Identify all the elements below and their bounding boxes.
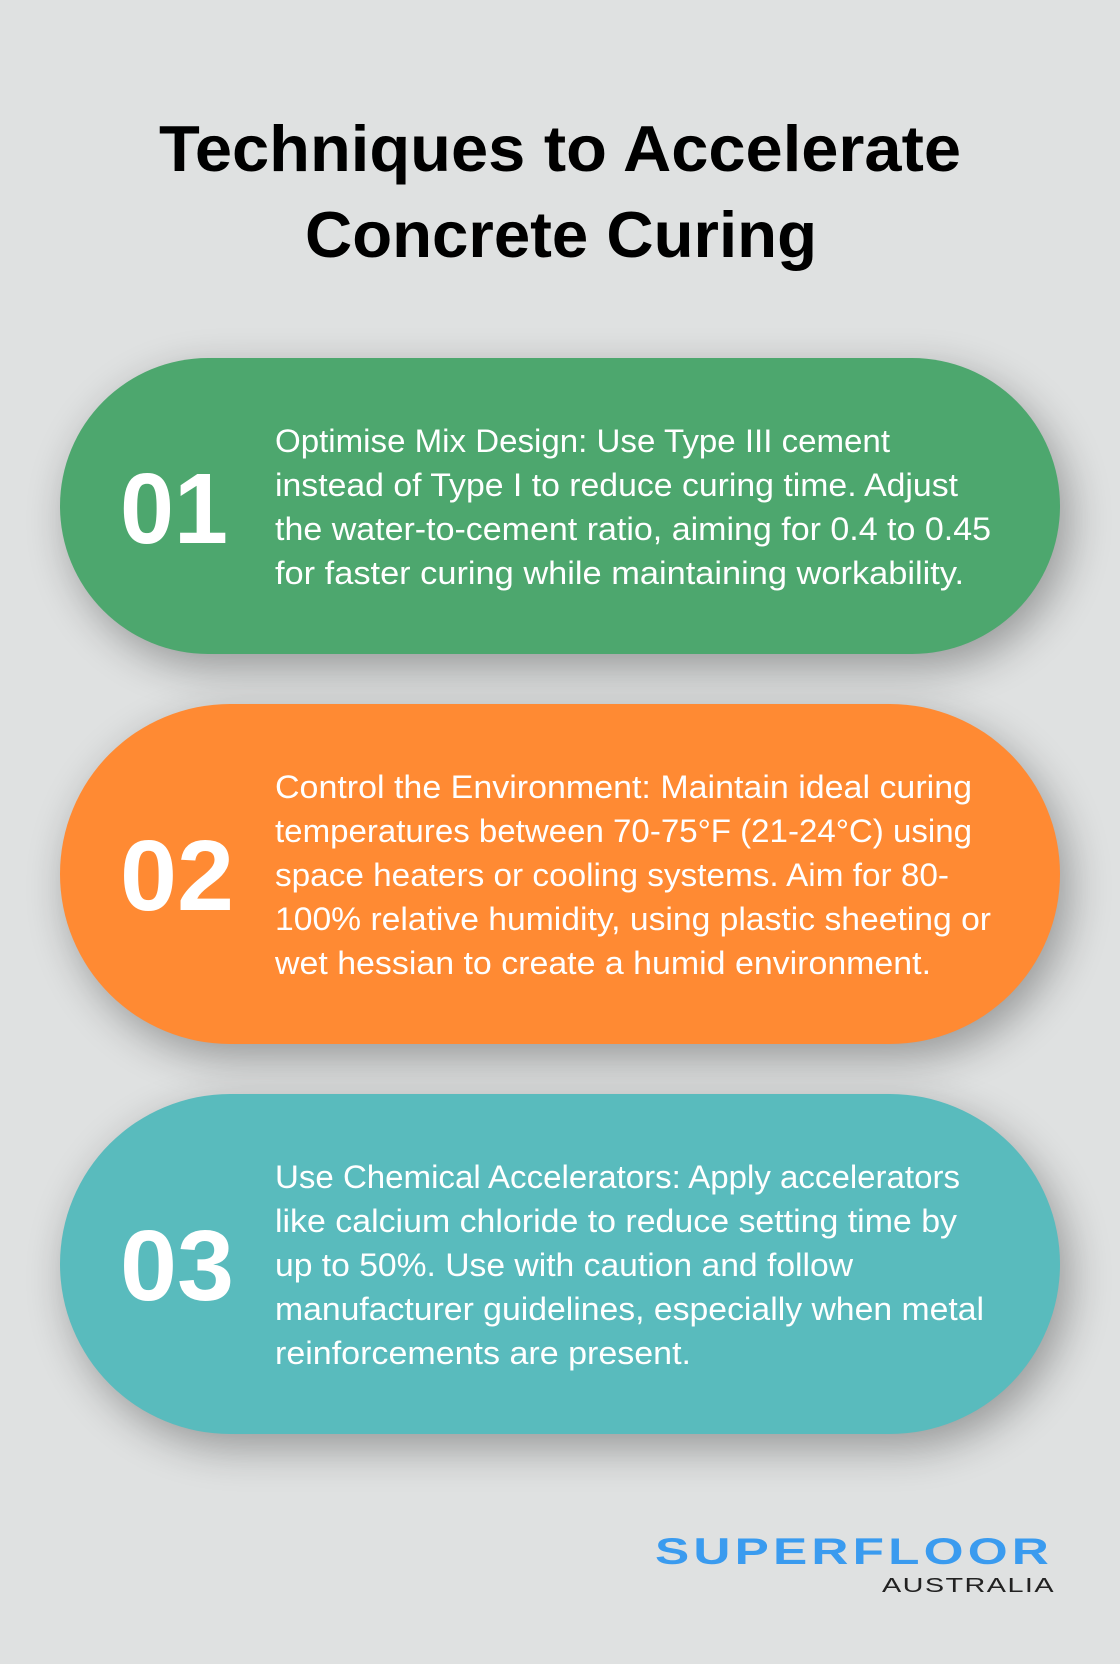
number 03: 03 (120, 1210, 234, 1322)
title (159, 112, 961, 271)
text block: step 2 description: Control the Environment: Maintain ideal curing (275, 769, 972, 805)
text block: step 3 description: up to 50%. Use with caution and follow (275, 1247, 854, 1283)
text block: step 3 description (275, 1159, 984, 1371)
panel: step 3 teal pill (60, 1094, 1060, 1434)
text block: step 3 description: Use Chemical Accelerators: Apply accelerators (275, 1159, 960, 1195)
panel: step 2 orange pill (60, 704, 1060, 1044)
text block: step 3 description: manufacturer guidelines, especially when metal (275, 1291, 984, 1327)
text block: step 2 description (274, 769, 991, 981)
text block: step 3 description: like calcium chloride to reduce setting time by (275, 1203, 957, 1239)
text block: step 1 description: Optimise Mix Design: Use Type III cement (275, 423, 890, 459)
logo: Superfloor Australia (655, 1531, 1055, 1597)
text block: step 1 description: instead of Type I to reduce curing time. Adjust (275, 467, 958, 503)
text block: step 2 description: wet hessian to create a humid environment. (274, 945, 931, 981)
number 01: 01 (120, 453, 228, 565)
logo: Superfloor Australia: AUSTRALIA (882, 1575, 1055, 1597)
text block: step 1 description (275, 423, 991, 591)
text block: step 1 description: the water-to-cement ratio, aiming for 0.4 to 0.45 (275, 511, 991, 547)
text block: step 1 description: for faster curing while maintaining workability. (275, 555, 964, 591)
panel: step 1 green pill (60, 358, 1060, 654)
text block: step 2 description: 100% relative humidity, using plastic sheeting or (275, 901, 991, 937)
logo: Superfloor Australia: SUPERFLOOR (655, 1531, 1053, 1572)
title: Techniques to Accelerate (159, 112, 961, 185)
text block: step 2 description: space heaters or cooling systems. Aim for 80- (275, 857, 949, 893)
text block: step 2 description: temperatures between 70-75°F (21-24°C) using (275, 813, 972, 849)
text block: step 3 description: reinforcements are present. (275, 1335, 691, 1371)
title: Concrete Curing (305, 198, 817, 271)
number 02: 02 (120, 820, 234, 932)
